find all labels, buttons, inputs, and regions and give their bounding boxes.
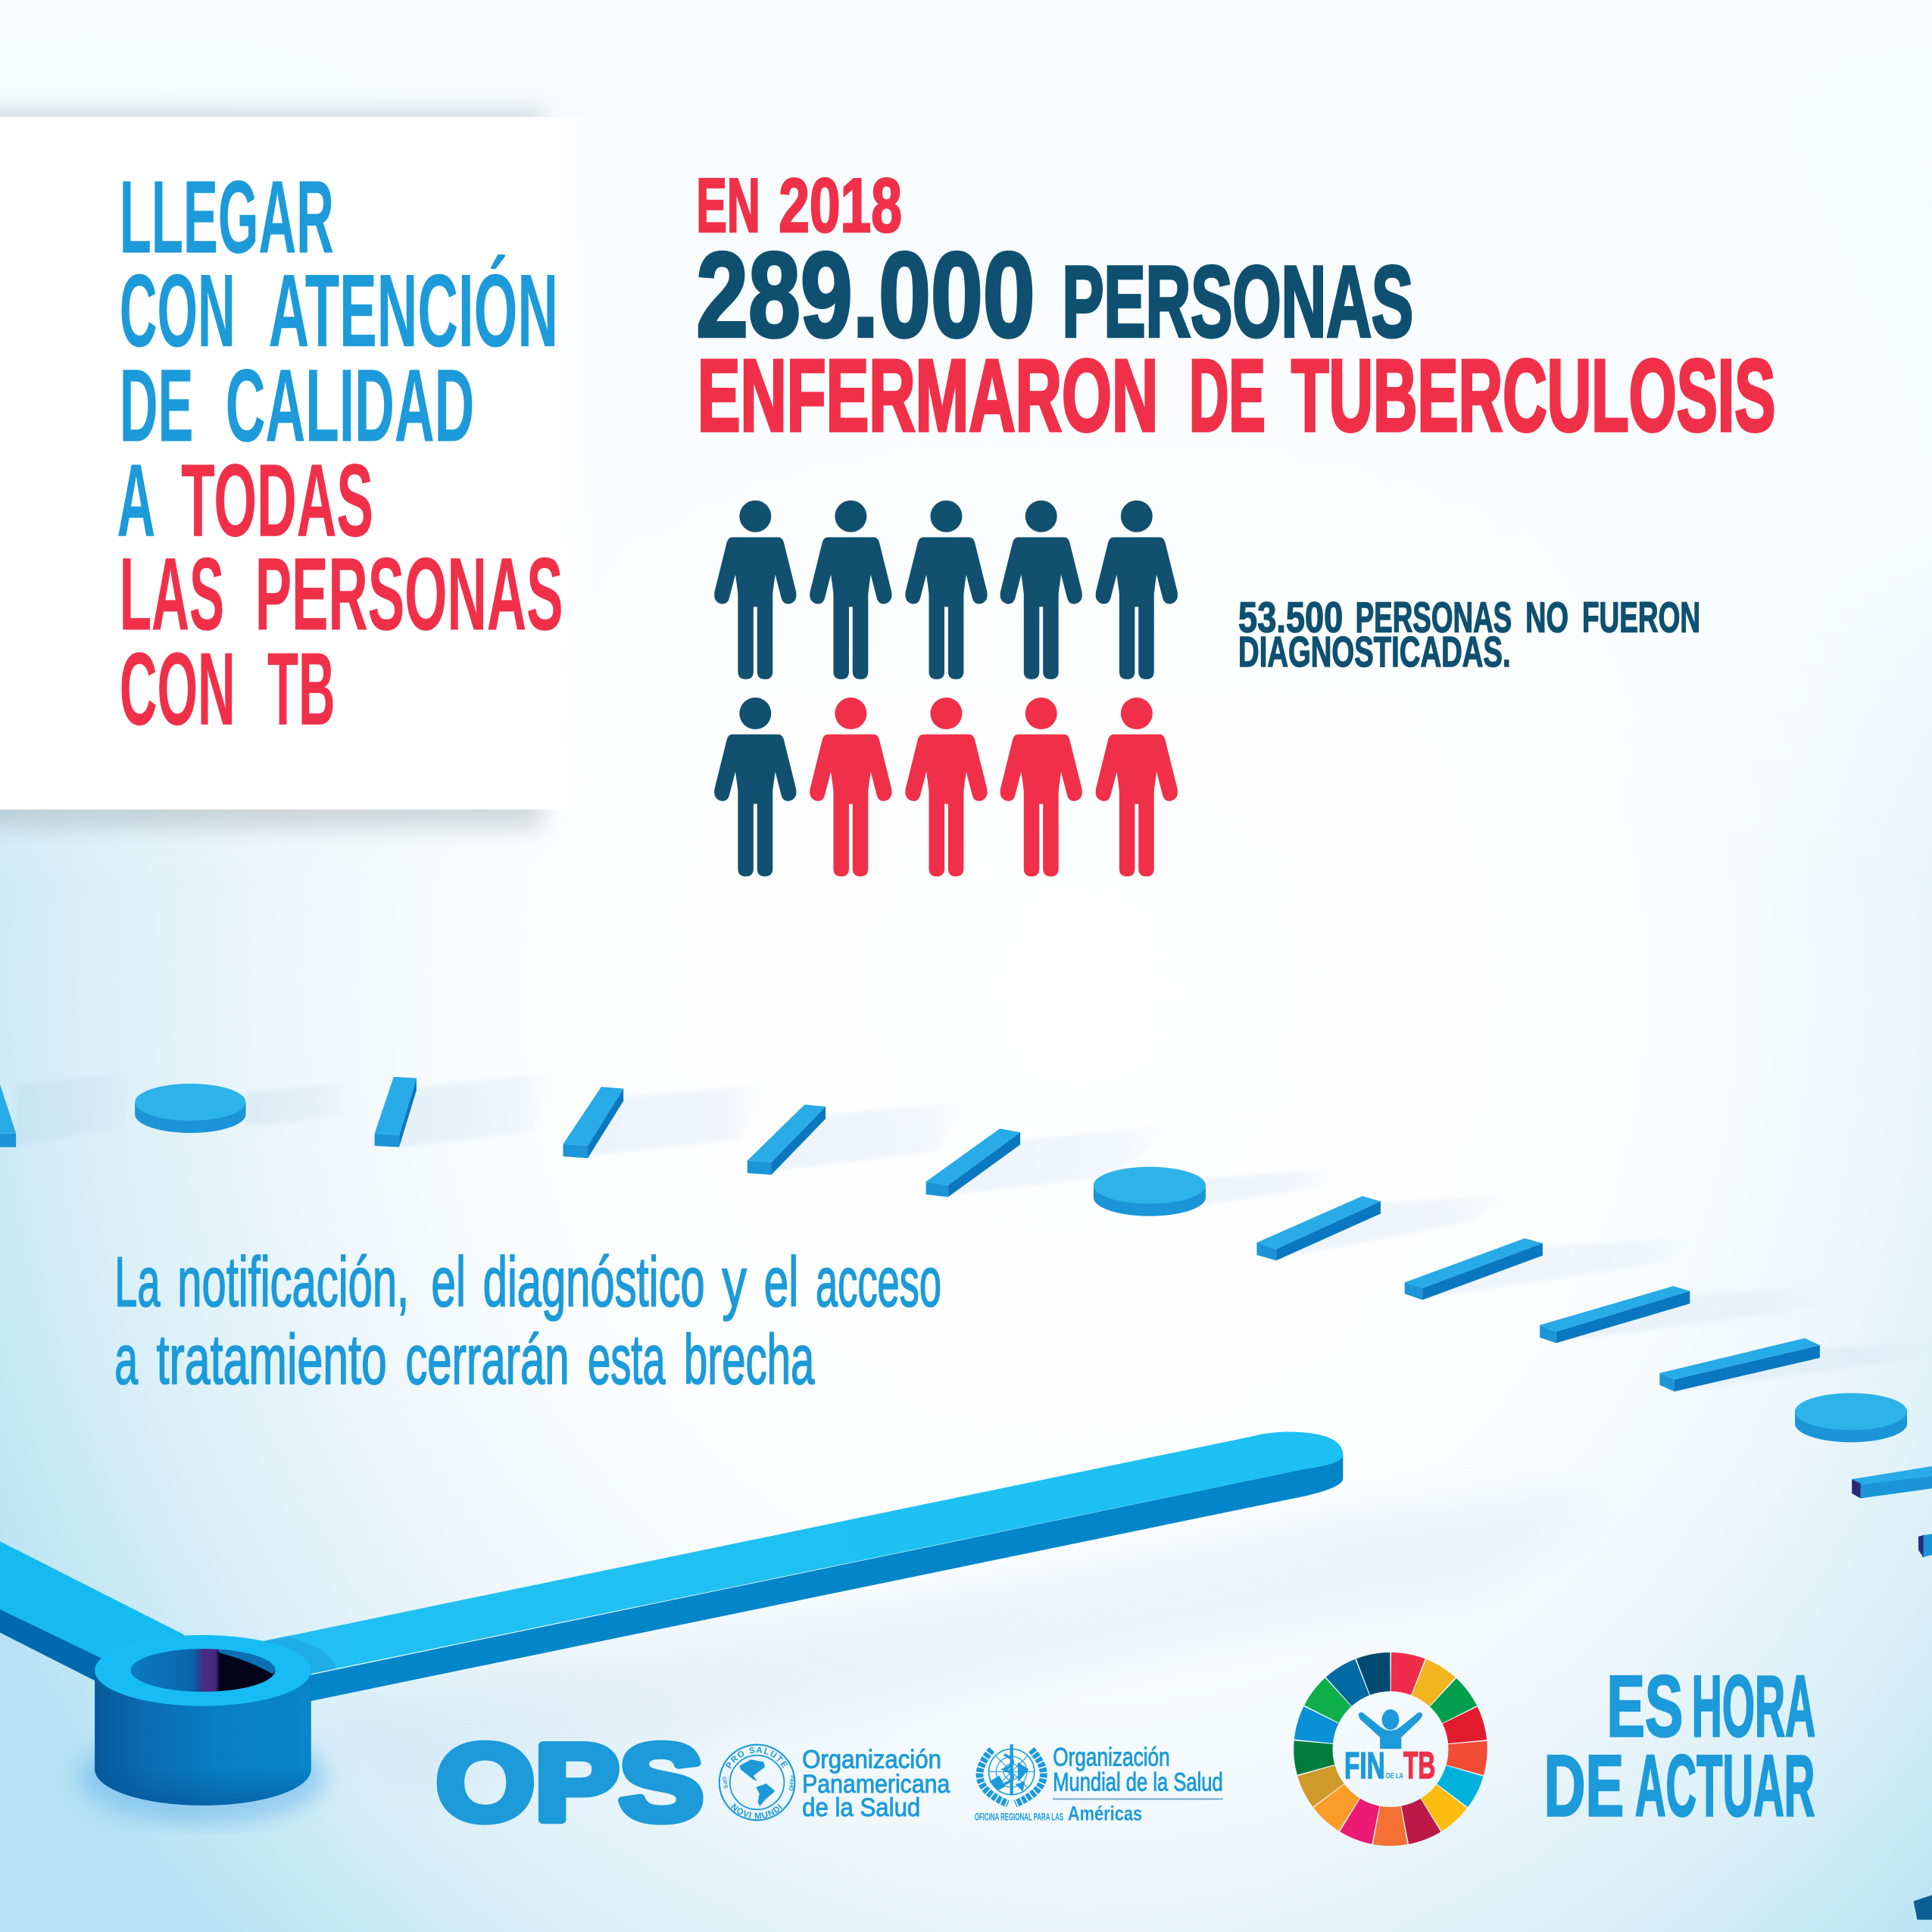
tick 7: [1405, 1238, 1543, 1300]
heading: llegar con atención de calidad a todas las personas con TB: PERSONAS: [255, 535, 563, 651]
hub cylinder: [95, 1635, 311, 1806]
supporting text: notification closes the gap: y: [722, 1243, 747, 1322]
logo: WHO emblem: [980, 1744, 1044, 1804]
wordmark: FIN: [1344, 1746, 1385, 1787]
logo text: Organización Mundial de la Salud: Organización: [1053, 1743, 1170, 1771]
person red: [1096, 698, 1178, 876]
logo: SDG wheel, Fin de la TB: [1281, 1640, 1500, 1859]
tick 3: [563, 1087, 623, 1158]
logo text: Organización Panamericana de la Salud: de la Salud: [802, 1793, 920, 1822]
tick 9: [1659, 1338, 1820, 1391]
clock hands and hub: [0, 1431, 1343, 1824]
supporting text: notification closes the gap: diagnóstico: [483, 1243, 705, 1322]
heading: llegar con atención de calidad a todas las personas con TB: LAS: [120, 535, 224, 651]
heading: llegar con atención de calidad a todas las personas con TB: TODAS: [181, 442, 373, 558]
supporting text: notification closes the gap: el: [764, 1243, 798, 1322]
tick 2: [375, 1077, 417, 1147]
panel: white heading card: [0, 117, 596, 810]
logo text: Organización Panamericana de la Salud: Organización: [802, 1746, 941, 1774]
supporting text: notification closes the gap: La: [114, 1243, 161, 1322]
logo text: Organización Mundial de la Salud: Américas: [1068, 1802, 1142, 1825]
person navy: [810, 501, 892, 679]
callout: undiagnosed people: 53.500: [1238, 594, 1343, 642]
logo text: Organización Mundial de la Salud: Mundial de la Salud: [1053, 1768, 1223, 1797]
pictogram: ten people: [714, 501, 1178, 876]
tick 12 corner: [1914, 1895, 1932, 1920]
headline: 289.000 personas: [696, 227, 1413, 362]
heading: llegar con atención de calidad a todas las personas con TB: DE: [120, 347, 193, 463]
headline: enfermaron de tuberculosis: ENFERMARON: [698, 339, 1158, 453]
supporting text: notification closes the gap: esta: [588, 1320, 666, 1399]
supporting text: notification closes the gap: tratamiento: [157, 1320, 387, 1399]
wordmark: [1344, 1743, 1435, 1787]
heading: llegar con atención de calidad a todas las personas con TB: TB: [267, 631, 336, 747]
logo text: Organización Panamericana de la Salud: Panamericana: [802, 1770, 950, 1799]
person navy: [905, 501, 988, 679]
headline: 289.000 personas: 289.000: [696, 227, 1035, 362]
logo: PAHO emblem: OPS: [721, 1776, 729, 1789]
heading: llegar con atención de calidad a todas las personas con TB: CON: [120, 631, 236, 747]
dot tick 1: [135, 1084, 246, 1133]
headline: 289.000 personas: PERSONAS: [1062, 245, 1413, 358]
panel shadow: [0, 111, 542, 828]
logo text: Organización Panamericana de la Salud: [802, 1746, 950, 1822]
heading: llegar con atención de calidad a todas las personas con TB: A: [117, 442, 155, 558]
tick 6: [1256, 1196, 1381, 1260]
person red: [905, 698, 988, 876]
headline: en 2018: 2018: [779, 164, 902, 248]
person red: [810, 698, 892, 876]
tick 5: [926, 1128, 1020, 1197]
tick 10 partial: [1852, 1466, 1932, 1498]
clock tick shadows: [16, 1072, 1932, 1391]
heading: llegar con atención de calidad a todas las personas con TB: CALIDAD: [226, 347, 474, 463]
headline: en 2018: [696, 164, 902, 248]
callout: undiagnosed people: [1238, 594, 1700, 676]
slogan: es hora de actuar: ES: [1606, 1657, 1683, 1755]
person navy: [714, 698, 796, 876]
logo text: Organización Mundial de la Salud: [975, 1743, 1223, 1825]
headline: enfermaron de tuberculosis: DE: [1189, 339, 1266, 453]
callout: undiagnosed people: FUERON: [1582, 594, 1700, 642]
slogan: es hora de actuar: [1544, 1657, 1815, 1834]
wordmark: DE LA: [1386, 1772, 1403, 1781]
tick 11 partial: [1918, 1534, 1932, 1557]
supporting text: notification closes the gap: acceso: [816, 1243, 941, 1322]
callout: undiagnosed people: DIAGNOSTICADAS.: [1238, 628, 1511, 676]
logo: PAHO emblem: PAHO: [788, 1775, 796, 1791]
supporting text: notification closes the gap: el: [431, 1243, 466, 1322]
supporting text: notification closes the gap: notificación,: [177, 1243, 409, 1322]
person navy: [714, 501, 796, 679]
logo: PAHO emblem: PRO SALUTE: [726, 1746, 788, 1769]
heading: llegar con atención de calidad a todas las personas con TB: LLEGAR: [120, 159, 334, 275]
slogan: es hora de actuar: DE: [1544, 1737, 1624, 1834]
logo: OPS: OPS: [436, 1722, 704, 1843]
wordmark: TB: [1403, 1743, 1435, 1787]
dot tick 2: [1094, 1167, 1206, 1216]
person navy: [1000, 501, 1082, 679]
person navy: [1096, 501, 1178, 679]
callout: undiagnosed people: NO: [1525, 594, 1568, 642]
logo: PAHO emblem: NOVI MUNDI: [731, 1803, 783, 1819]
headline: en 2018: EN: [696, 164, 760, 248]
callout: undiagnosed people: PERSONAS: [1356, 594, 1512, 642]
short hand: [0, 1541, 185, 1686]
supporting text: notification closes the gap: brecha: [684, 1320, 815, 1399]
person red: [1000, 698, 1082, 876]
supporting text: notification closes the gap: [114, 1243, 941, 1399]
wheel segments: [1281, 1640, 1500, 1859]
tick 8: [1540, 1286, 1690, 1343]
supporting text: notification closes the gap: a: [114, 1320, 138, 1399]
person raising arms: [1359, 1709, 1422, 1749]
dot tick 3: [1795, 1393, 1907, 1442]
clock ticks: [0, 1077, 1932, 1920]
heading: llegar con atención de calidad a todas las personas con TB: ATENCIÓN: [269, 252, 558, 368]
logo text: Organización Mundial de la Salud: OFICINA REGIONAL PARA LAS: [975, 1811, 1063, 1823]
long hand: [264, 1431, 1344, 1701]
hub glow: [80, 1730, 326, 1824]
heading: llegar con atención de calidad a todas las personas con TB: [117, 159, 563, 747]
headline: enfermaron de tuberculosis: [698, 339, 1775, 453]
tick 4: [748, 1105, 826, 1175]
logo: PAHO emblem: [718, 1743, 796, 1821]
tick partial left: [0, 1085, 16, 1147]
heading: llegar con atención de calidad a todas las personas con TB: CON: [120, 252, 236, 368]
supporting text: notification closes the gap: cerrarán: [405, 1320, 570, 1399]
